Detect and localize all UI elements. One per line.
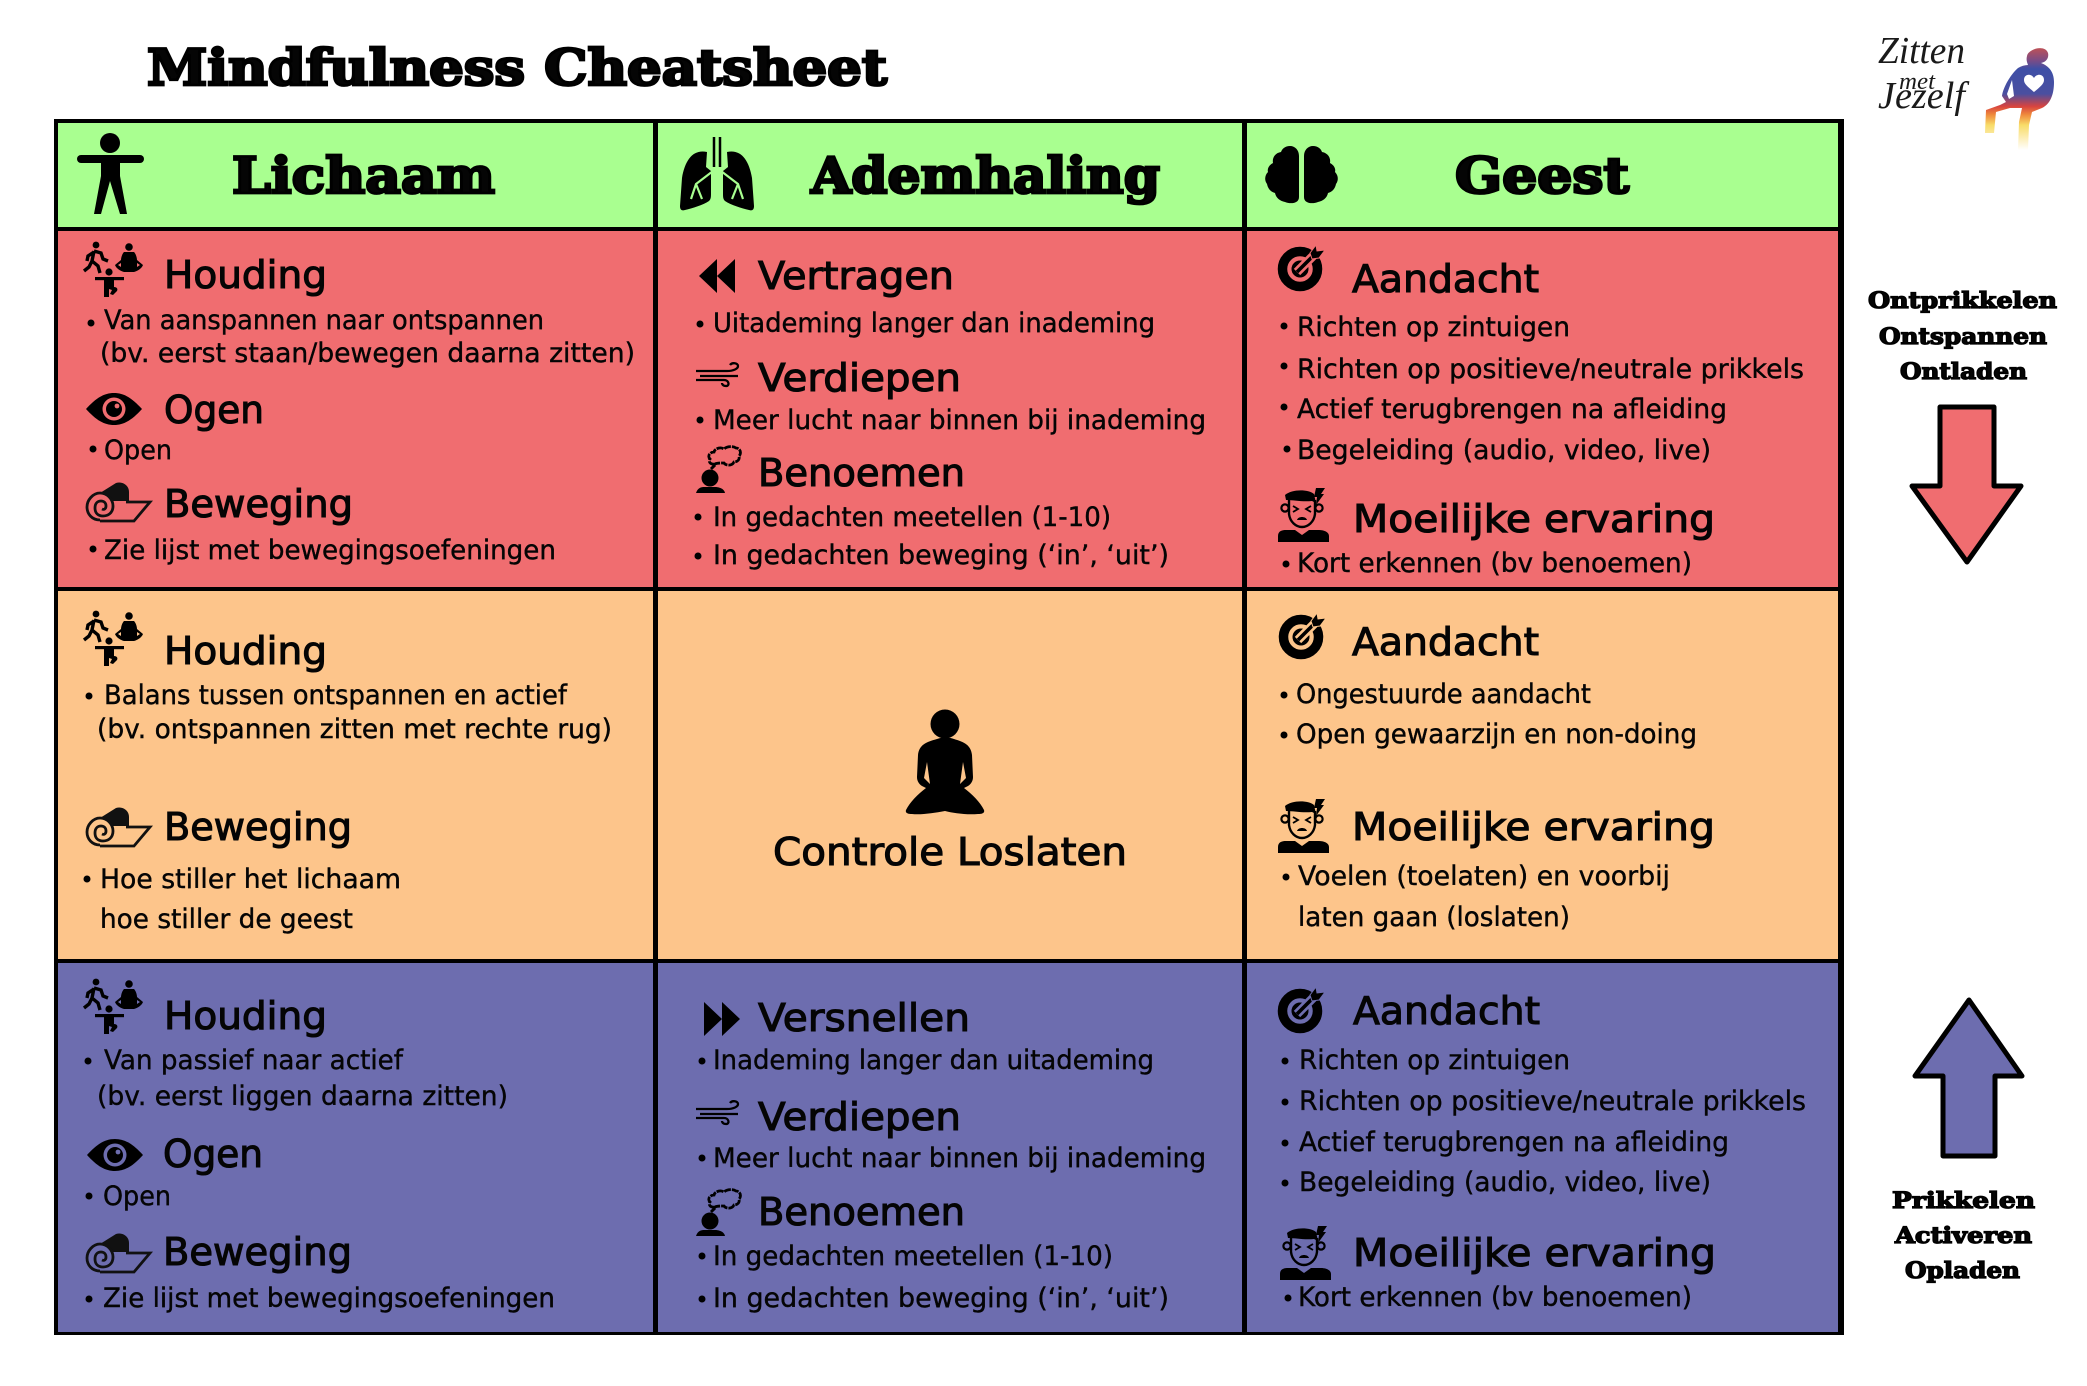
heading: Ademhaling: Ademhaling (810, 146, 1160, 205)
section: Houding (84, 242, 635, 369)
section: Benoemen: Benoemen (758, 1190, 965, 1234)
side label: Prikkelen Activeren Opladen: Activeren (1894, 1223, 2032, 1249)
section: Houding: (bv. ontspannen zitten met rechte rug) (97, 714, 612, 745)
icon: mat (87, 482, 150, 521)
section: Aandacht (1280, 613, 1697, 750)
side label: Ontprikkelen Ontspannen Ontladen: Ontprikkelen (1868, 288, 2057, 314)
icon: mat (87, 1233, 150, 1272)
section: Beweging: Beweging (164, 805, 352, 849)
logo: Zitten met Jezelf: Zitten (1878, 30, 1965, 72)
icon: eye (86, 393, 142, 425)
panel: Ademhaling low (658, 963, 1242, 1332)
icon: mat (87, 807, 150, 846)
header row (58, 123, 1838, 227)
icon: lungs (680, 137, 754, 210)
icon: brain (1265, 146, 1338, 203)
section: Aandacht: Richten op zintuigen (1297, 312, 1570, 343)
section: Versnellen: Inademing langer dan uitademing (713, 1045, 1154, 1076)
section: Houding (84, 979, 508, 1112)
section: Ogen (86, 1132, 263, 1212)
section: Ogen: Open (104, 435, 172, 466)
section: Verdiepen (696, 356, 1206, 436)
side label: Prikkelen Activeren Opladen (1892, 1188, 2035, 1284)
icon: stressed face (1278, 488, 1329, 542)
icon: thinking person (696, 1190, 740, 1236)
section: Verdiepen: Meer lucht naar binnen bij inademing (713, 1143, 1206, 1174)
icon: wind (696, 1101, 738, 1124)
section: Moeilijke ervaring: Moeilijke ervaring (1353, 1231, 1716, 1275)
section: Moeilijke ervaring (1280, 1226, 1716, 1313)
section: Ogen: Ogen (164, 388, 264, 432)
section: Beweging: Beweging (163, 1230, 352, 1274)
section: Verdiepen (696, 1095, 1206, 1174)
section: Aandacht: Open gewaarzijn en non-doing (1296, 719, 1697, 750)
icon: stressed face (1278, 799, 1329, 853)
icon: target (1284, 613, 1326, 654)
panel: Geest low (1247, 963, 1838, 1332)
section: Moeilijke ervaring (1278, 799, 1715, 933)
title: Mindfulness Cheatsheet (147, 38, 887, 97)
side label: Ontprikkelen Ontspannen Ontladen (1868, 288, 2057, 385)
section: Houding: (bv. eerst liggen daarna zitten) (97, 1081, 508, 1112)
section: Verdiepen: Verdiepen (758, 356, 961, 400)
section: Houding: Van aanspannen naar ontspannen (104, 305, 544, 336)
icon: eye (87, 1139, 143, 1171)
section: Moeilijke ervaring: laten gaan (loslaten) (1298, 902, 1570, 933)
section: Verdiepen: Meer lucht naar binnen bij inademing (713, 405, 1206, 436)
section: Moeilijke ervaring: Voelen (toelaten) en voorbij (1298, 861, 1670, 892)
section: Beweging: hoe stiller de geest (100, 904, 353, 935)
icon: body (81, 133, 140, 214)
section: Benoemen: Benoemen (758, 451, 965, 495)
section: Ogen (86, 388, 264, 466)
section: Houding: (bv. eerst staan/bewegen daarna zitten) (100, 338, 635, 369)
section: Vertragen: Uitademing langer dan inademing (713, 308, 1155, 339)
side label: Prikkelen Activeren Opladen: Opladen (1905, 1258, 2020, 1284)
section: Versnellen: Versnellen (758, 996, 970, 1040)
section: Houding: Balans tussen ontspannen en actief (104, 680, 568, 711)
panel: Geest neutral (1247, 591, 1838, 959)
heading: Lichaam: Lichaam (232, 146, 495, 205)
section: Aandacht: Richten op zintuigen (1299, 1045, 1570, 1076)
arrow: up (1915, 1000, 2022, 1156)
logo: Zitten met Jezelf (1878, 30, 2054, 150)
section: Benoemen: In gedachten beweging (‘in’, ‘uit’) (713, 1283, 1169, 1314)
section: Houding: Houding (164, 629, 327, 673)
icon: posture (84, 242, 143, 297)
section: Ogen: Open (103, 1181, 171, 1212)
section: Houding: Houding (164, 253, 327, 297)
section: Benoemen (696, 1190, 1169, 1314)
logo: Zitten met Jezelf: met (1899, 69, 1936, 95)
section: Aandacht: Aandacht (1353, 989, 1540, 1033)
icon: meditating figure (906, 710, 984, 814)
section: Aandacht: Actief terugbrengen na afleiding (1299, 1127, 1729, 1158)
icon: target (1282, 245, 1325, 286)
section: Houding (84, 611, 612, 745)
section: Aandacht: Begeleiding (audio, video, live) (1297, 435, 1711, 466)
section: Moeilijke ervaring: Kort erkennen (bv benoemen) (1298, 1282, 1692, 1313)
section: Beweging: Zie lijst met bewegingsoefeningen (104, 535, 556, 566)
icon: thinking person (696, 447, 740, 493)
section: Aandacht: Aandacht (1352, 620, 1539, 664)
logo: Zitten met Jezelf: Jezelf (1878, 75, 1969, 117)
icon: posture (84, 611, 143, 666)
icon: posture (84, 979, 143, 1034)
section: Aandacht (1282, 987, 1806, 1198)
section: Aandacht: Ongestuurde aandacht (1296, 679, 1591, 710)
section: Benoemen: In gedachten beweging (‘in’, ‘uit’) (713, 540, 1169, 571)
section: Vertragen (696, 254, 1155, 339)
section: Aandacht (1280, 245, 1804, 466)
section: Aandacht: Begeleiding (audio, video, live) (1299, 1167, 1711, 1198)
heading: Geest: Geest (1455, 146, 1629, 205)
icon: wind (696, 363, 738, 386)
side label: Ontprikkelen Ontspannen Ontladen: Ontladen (1900, 359, 2027, 385)
logo figure (1985, 48, 2054, 150)
section: Aandacht: Actief terugbrengen na afleiding (1297, 394, 1727, 425)
section: Beweging: Zie lijst met bewegingsoefeningen (103, 1283, 555, 1314)
panel: Lichaam high (58, 231, 653, 587)
section: Verdiepen: Verdiepen (758, 1095, 961, 1139)
section: Aandacht: Richten op positieve/neutrale prikkels (1299, 1086, 1806, 1117)
section: Versnellen (698, 996, 1154, 1076)
section: Beweging (86, 1230, 555, 1314)
section: Beweging (87, 482, 556, 566)
table grid (54, 119, 1844, 1335)
side label: Prikkelen Activeren Opladen: Prikkelen (1892, 1188, 2035, 1214)
section: Aandacht: Richten op positieve/neutrale prikkels (1297, 354, 1804, 385)
section: Moeilijke ervaring: Kort erkennen (bv benoemen) (1297, 548, 1692, 579)
panel: Ademhaling high (658, 231, 1242, 587)
section: Moeilijke ervaring: Moeilijke ervaring (1352, 805, 1715, 849)
section: Benoemen: In gedachten meetellen (1-10) (713, 1241, 1113, 1272)
icon: fast forward (704, 1002, 740, 1036)
section: Ogen: Ogen (163, 1132, 263, 1176)
panel: Ademhaling neutral (658, 591, 1242, 959)
section: Beweging (84, 805, 401, 935)
side label: Ontprikkelen Ontspannen Ontladen: Ontspannen (1879, 324, 2047, 350)
section: Benoemen: In gedachten meetellen (1-10) (713, 502, 1111, 533)
heading: Controle Loslaten: Controle Loslaten (773, 830, 1127, 874)
icon: rewind (699, 259, 735, 293)
section: Vertragen: Vertragen (758, 254, 954, 298)
section: Houding: Houding (164, 994, 327, 1038)
section: Aandacht: Aandacht (1352, 257, 1539, 301)
section: Beweging: Beweging (164, 482, 353, 526)
section: Beweging: Hoe stiller het lichaam (100, 864, 401, 895)
panel: Lichaam low (58, 963, 653, 1332)
panel: Lichaam neutral (58, 591, 653, 959)
icon: target (1282, 987, 1325, 1028)
section: Houding: Van passief naar actief (104, 1045, 404, 1076)
arrow: down (1912, 407, 2021, 562)
section: Benoemen (694, 447, 1169, 571)
section: Moeilijke ervaring: Moeilijke ervaring (1353, 497, 1715, 541)
panel: Geest high (1247, 231, 1838, 587)
section: Moeilijke ervaring (1278, 488, 1715, 579)
icon: stressed face (1280, 1226, 1331, 1280)
